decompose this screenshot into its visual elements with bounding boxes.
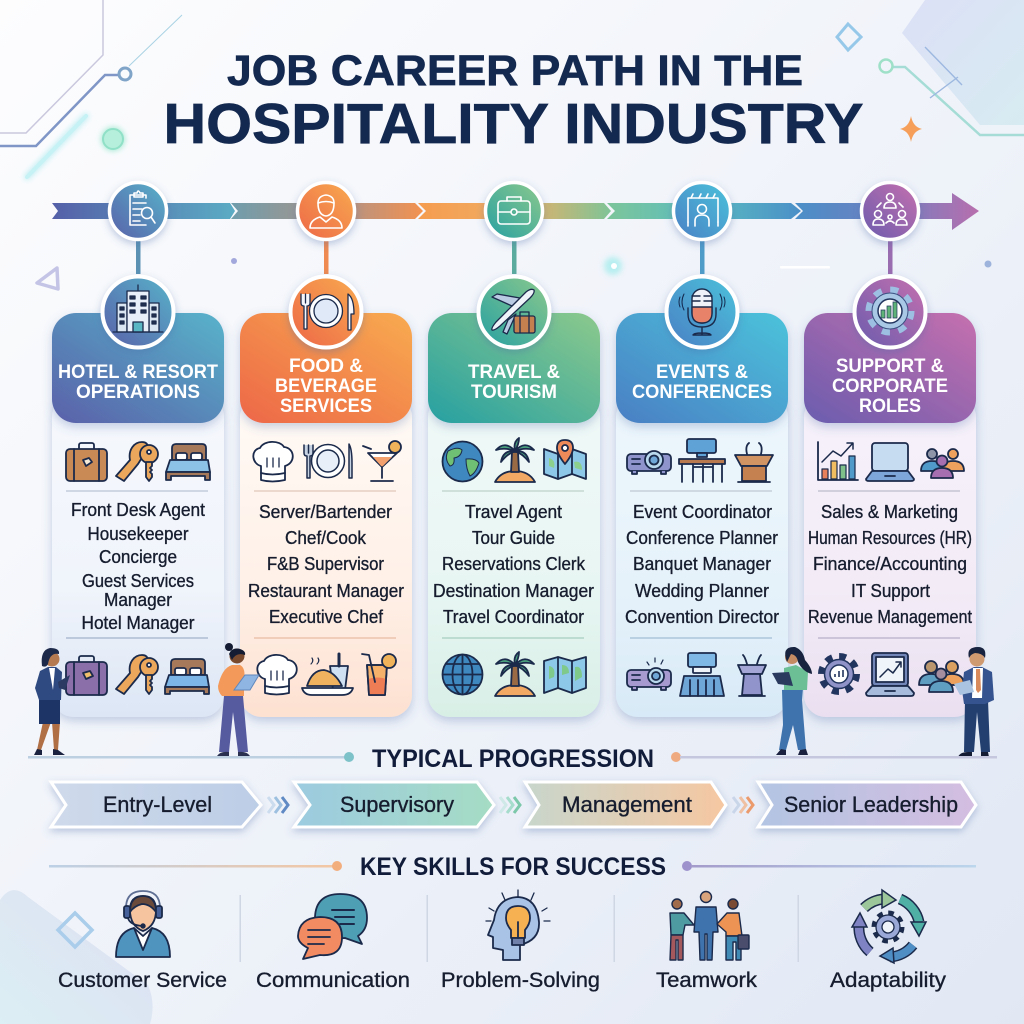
skill: problem-solving xyxy=(441,890,600,992)
skill label: Problem-Solving xyxy=(441,969,600,992)
decoration: floating marks xyxy=(37,257,992,289)
panel heading: SERVICES xyxy=(280,396,372,417)
title xyxy=(164,47,864,156)
icon: lectern xyxy=(735,443,773,482)
panel: events and conferences xyxy=(616,276,788,717)
job list xyxy=(625,502,779,627)
panel heading: HOTEL & RESORT xyxy=(58,362,218,383)
title: JOB CAREER PATH IN THE xyxy=(227,47,803,95)
panel: support and corporate roles xyxy=(804,276,976,717)
panel heading xyxy=(832,356,948,417)
skill: communication xyxy=(256,894,410,992)
job list: Guest Services xyxy=(82,571,194,591)
panel heading: EVENTS & xyxy=(656,362,748,383)
job list: Conference Planner xyxy=(626,528,778,548)
skill: customer service xyxy=(58,891,227,992)
skill label: Communication xyxy=(256,969,410,992)
icon: lectern xyxy=(738,655,766,696)
skill: teamwork xyxy=(656,892,758,992)
stage: entry-level xyxy=(51,782,261,827)
job list: Wedding Planner xyxy=(635,581,769,601)
panel heading: TRAVEL & xyxy=(468,362,560,383)
chevrons xyxy=(268,797,288,813)
panel: food and beverage services xyxy=(240,276,412,717)
node: team structure xyxy=(862,182,918,240)
panel header xyxy=(616,313,788,423)
icon: fork and plate xyxy=(304,444,352,478)
divider xyxy=(254,490,396,492)
icon: chef hat xyxy=(253,442,293,482)
job list: Server/Bartender xyxy=(259,502,392,522)
job list: Revenue Management xyxy=(808,607,972,627)
icon: map with pin xyxy=(544,440,586,479)
job list: Banquet Manager xyxy=(633,554,771,574)
skill: adaptability xyxy=(830,890,947,992)
job list: Hotel Manager xyxy=(82,613,194,633)
icon: folded map xyxy=(544,657,586,693)
icon: bed xyxy=(166,444,210,480)
icon: keys xyxy=(116,655,158,694)
job list: Reservations Clerk xyxy=(442,554,586,574)
job list: Executive Chef xyxy=(269,607,384,627)
career path timeline xyxy=(52,182,979,274)
job list: Front Desk Agent xyxy=(71,500,205,520)
icon: gear xyxy=(822,657,856,691)
title: HOSPITALITY INDUSTRY xyxy=(164,92,864,156)
panel heading: OPERATIONS xyxy=(76,382,200,403)
panel body xyxy=(428,395,600,717)
job list: Sales & Marketing xyxy=(821,502,958,522)
icon: suitcase xyxy=(66,443,107,481)
panel: hotel and resort operations xyxy=(52,276,224,717)
icon: growth chart xyxy=(818,442,858,480)
icon: juice glass xyxy=(362,654,396,695)
icon: team group xyxy=(921,449,964,478)
job list: IT Support xyxy=(851,581,930,601)
icon: speech bubbles xyxy=(298,894,367,959)
job list: Destination Manager xyxy=(433,581,594,601)
job list: F&B Supervisor xyxy=(267,554,384,574)
job list: Concierge xyxy=(99,547,177,567)
icon: airplane and luggage xyxy=(478,276,550,348)
icon: three people xyxy=(670,892,749,960)
icon: desk with monitor xyxy=(679,439,725,482)
panel heading: FOOD & xyxy=(289,356,363,377)
chevrons xyxy=(733,797,753,813)
divider xyxy=(66,637,208,639)
divider xyxy=(818,637,960,639)
divider xyxy=(66,490,208,492)
section heading: typical progression xyxy=(28,745,997,773)
icon: chef hat xyxy=(257,655,297,694)
panel header xyxy=(240,313,412,423)
chevrons xyxy=(500,797,520,813)
job list xyxy=(808,502,972,627)
icon: draped table xyxy=(680,653,724,696)
progression stages xyxy=(51,782,976,827)
figure: woman with laptop xyxy=(217,643,259,756)
node: clipboard search xyxy=(110,182,166,240)
icon: meal and drink xyxy=(302,654,353,695)
job list xyxy=(248,502,404,627)
divider xyxy=(442,637,584,639)
job list: Travel Coordinator xyxy=(443,607,584,627)
section heading: key skills xyxy=(49,853,976,881)
icon: team group xyxy=(919,661,964,692)
panel heading xyxy=(468,362,560,403)
job list: Event Coordinator xyxy=(633,502,772,522)
icon: headset agent xyxy=(116,891,170,957)
icon: laptop with trend xyxy=(866,653,914,696)
job list: Chef/Cook xyxy=(285,528,367,548)
skill dividers xyxy=(240,895,799,962)
icon: globe xyxy=(442,442,482,482)
icon: cocktail xyxy=(363,441,401,481)
divider xyxy=(630,637,772,639)
stage: management xyxy=(525,782,726,827)
job list: Restaurant Manager xyxy=(248,581,404,601)
job list: Travel Agent xyxy=(465,502,562,522)
connectors xyxy=(136,240,892,274)
panel header xyxy=(428,313,600,423)
panel heading xyxy=(58,362,218,403)
skill label: Customer Service xyxy=(58,969,227,992)
icon: palm tree xyxy=(495,652,535,696)
divider xyxy=(254,637,396,639)
stage: senior leadership xyxy=(758,782,976,827)
section heading: typical progression: TYPICAL PROGRESSION xyxy=(372,745,654,773)
job list: Tour Guide xyxy=(472,528,555,548)
job list xyxy=(433,502,594,627)
figure: man in suit xyxy=(954,647,994,757)
node: event stage xyxy=(674,182,730,240)
stage: supervisory: Supervisory xyxy=(340,792,454,817)
panel body xyxy=(52,395,224,717)
panel header xyxy=(52,313,224,423)
panel body xyxy=(616,395,788,717)
panel: travel and tourism xyxy=(428,276,600,717)
panel body xyxy=(240,395,412,717)
panel heading: SUPPORT & xyxy=(836,356,944,377)
icon: gear with chart xyxy=(854,276,926,348)
panel heading: CONFERENCES xyxy=(632,382,772,403)
decoration: bottom-left shape xyxy=(0,890,153,1024)
figure: woman with tablet xyxy=(34,648,70,755)
panel heading xyxy=(632,362,772,403)
job list: Manager xyxy=(104,590,172,610)
job list: Human Resources (HR) xyxy=(808,528,972,548)
icon: bed xyxy=(165,659,209,694)
job list: Convention Director xyxy=(625,607,779,627)
stage: supervisory xyxy=(294,782,494,827)
divider xyxy=(630,490,772,492)
figure: woman with folder xyxy=(772,647,812,755)
icon: microphone xyxy=(666,276,738,348)
icon: projector with rays xyxy=(627,658,671,690)
panel heading: TOURISM xyxy=(471,382,557,403)
panel heading: BEVERAGE xyxy=(275,376,377,397)
stage: management: Management xyxy=(562,792,692,817)
icon: keys xyxy=(116,442,158,481)
decoration: top-right shapes xyxy=(837,0,1024,142)
job list xyxy=(71,500,205,633)
divider xyxy=(442,490,584,492)
stage: entry-level: Entry-Level xyxy=(103,792,212,817)
divider xyxy=(818,490,960,492)
icon: purple suitcase xyxy=(66,656,107,695)
section heading: key skills: KEY SKILLS FOR SUCCESS xyxy=(360,853,666,881)
timeline arrow bar xyxy=(52,193,979,230)
node: staff member xyxy=(298,182,354,240)
stage: senior leadership: Senior Leadership xyxy=(784,792,958,817)
job list: Finance/Accounting xyxy=(813,554,967,574)
icon: plate and cutlery xyxy=(290,276,362,348)
panel heading: ROLES xyxy=(859,396,921,417)
skill label: Teamwork xyxy=(656,969,758,992)
icon: gear with cycle arrows xyxy=(852,890,926,963)
icon: palm tree xyxy=(495,438,535,482)
job list: Housekeeper xyxy=(88,524,188,544)
decoration: top-left circuit xyxy=(0,0,182,177)
panel body xyxy=(804,395,976,717)
icon: projector xyxy=(627,451,671,474)
icon: wire globe xyxy=(442,654,482,694)
icon: laptop xyxy=(866,443,914,481)
icon: hotel building xyxy=(102,276,174,348)
panel header xyxy=(804,313,976,423)
skill label: Adaptability xyxy=(830,969,947,992)
panel heading: CORPORATE xyxy=(832,376,948,397)
icon: head with lightbulb xyxy=(486,890,550,960)
panel heading xyxy=(275,356,377,417)
node: briefcase xyxy=(486,182,542,240)
